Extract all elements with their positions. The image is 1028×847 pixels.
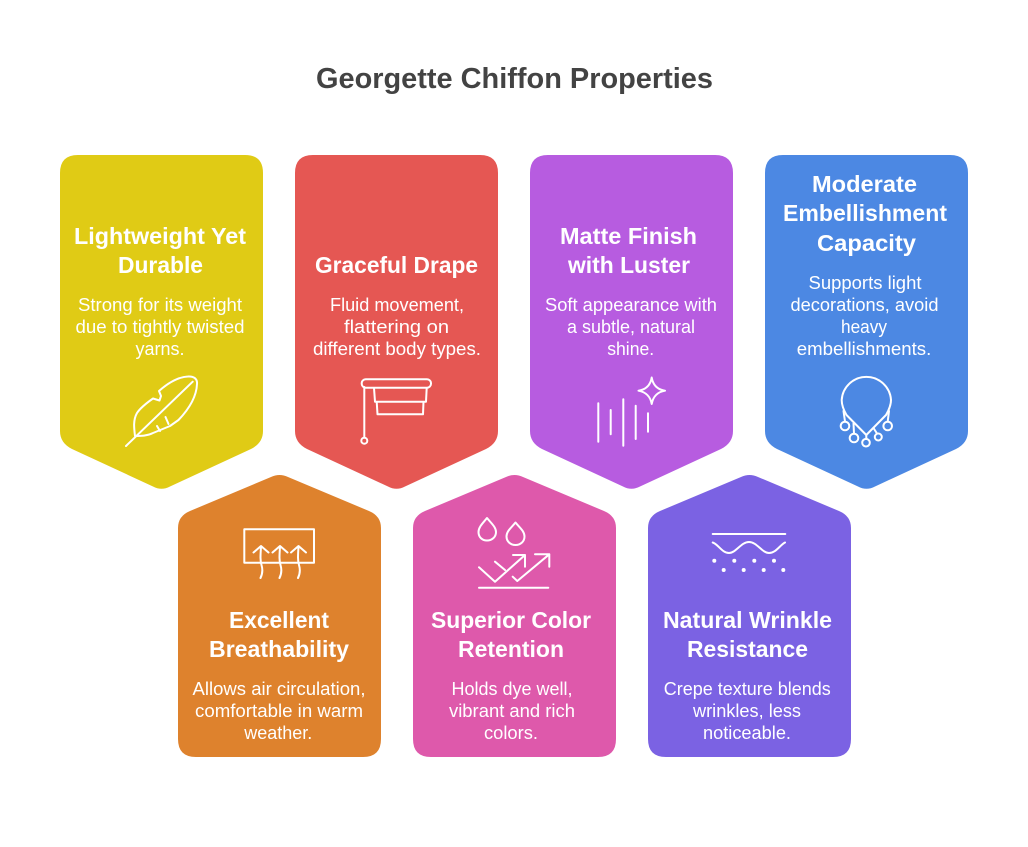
title: Georgette Chiffon Properties (316, 63, 713, 95)
panel: lightweight yet durable: Durable (118, 252, 203, 278)
panel: moderate embellishment capacity: Supports light (808, 273, 922, 293)
panel: lightweight yet durable: Lightweight Yet (74, 223, 246, 249)
panel: lightweight yet durable: Strong for its weight (78, 295, 242, 315)
panel: excellent breathability: Excellent (229, 607, 329, 633)
panel: moderate embellishment capacity: Capacity (817, 230, 916, 256)
panel: natural wrinkle resistance: Resistance (687, 636, 808, 662)
panel: graceful drape: different body types. (313, 339, 481, 359)
panel: moderate embellishment capacity: heavy (841, 317, 887, 337)
panel: natural wrinkle resistance: noticeable. (703, 723, 791, 743)
panel: graceful drape: Fluid movement, (330, 295, 464, 315)
panel: excellent breathability: comfortable in warm (195, 701, 363, 721)
panel: natural wrinkle resistance (648, 475, 851, 757)
panel: moderate embellishment capacity: Moderate (812, 171, 917, 197)
panel: matte finish with luster: Matte Finish (560, 223, 697, 249)
icon: air flow (244, 529, 314, 578)
panel: graceful drape: Graceful Drape (315, 252, 478, 278)
panel: excellent breathability: Allows air circulation, (192, 679, 366, 699)
panel: natural wrinkle resistance: wrinkles, less (692, 701, 801, 721)
panel: superior color retention: vibrant and rich (449, 701, 575, 721)
panel: moderate embellishment capacity: embellishments. (797, 339, 931, 359)
panel: moderate embellishment capacity (765, 155, 968, 489)
icon: sparkle (598, 378, 665, 446)
panel: matte finish with luster: with Luster (567, 252, 690, 278)
panel: excellent breathability: Breathability (209, 636, 349, 662)
panel: matte finish with luster (530, 155, 733, 489)
panel: graceful drape: flattering on (344, 317, 449, 337)
panel: graceful drape (295, 155, 498, 489)
icon: feather (126, 376, 197, 446)
panel: natural wrinkle resistance: Natural Wrinkle (663, 607, 832, 633)
panel: superior color retention: colors. (484, 723, 538, 743)
panel: lightweight yet durable: due to tightly twisted (76, 317, 244, 337)
panel: lightweight yet durable (60, 155, 263, 489)
panel: moderate embellishment capacity: Embellishment (783, 200, 947, 226)
panel: superior color retention (413, 475, 616, 757)
icon: skin texture (712, 534, 785, 572)
panel: lightweight yet durable: yarns. (136, 339, 184, 359)
icon: necklace (841, 377, 892, 447)
panel: matte finish with luster: a subtle, natural (567, 317, 695, 337)
icon: window blind (361, 379, 431, 444)
panel: natural wrinkle resistance: Crepe texture blends (664, 679, 831, 699)
panel: matte finish with luster: shine. (607, 339, 654, 359)
panel: excellent breathability: weather. (243, 723, 312, 743)
panel: moderate embellishment capacity: decorations, avoid (790, 295, 938, 315)
panel: excellent breathability (178, 475, 381, 757)
icon: drops and rising arrows (478, 518, 549, 588)
panel: superior color retention: Holds dye well, (452, 679, 572, 699)
panel: superior color retention: Retention (458, 636, 564, 662)
panel: matte finish with luster: Soft appearance with (545, 295, 717, 315)
panel: superior color retention: Superior Color (431, 607, 591, 633)
